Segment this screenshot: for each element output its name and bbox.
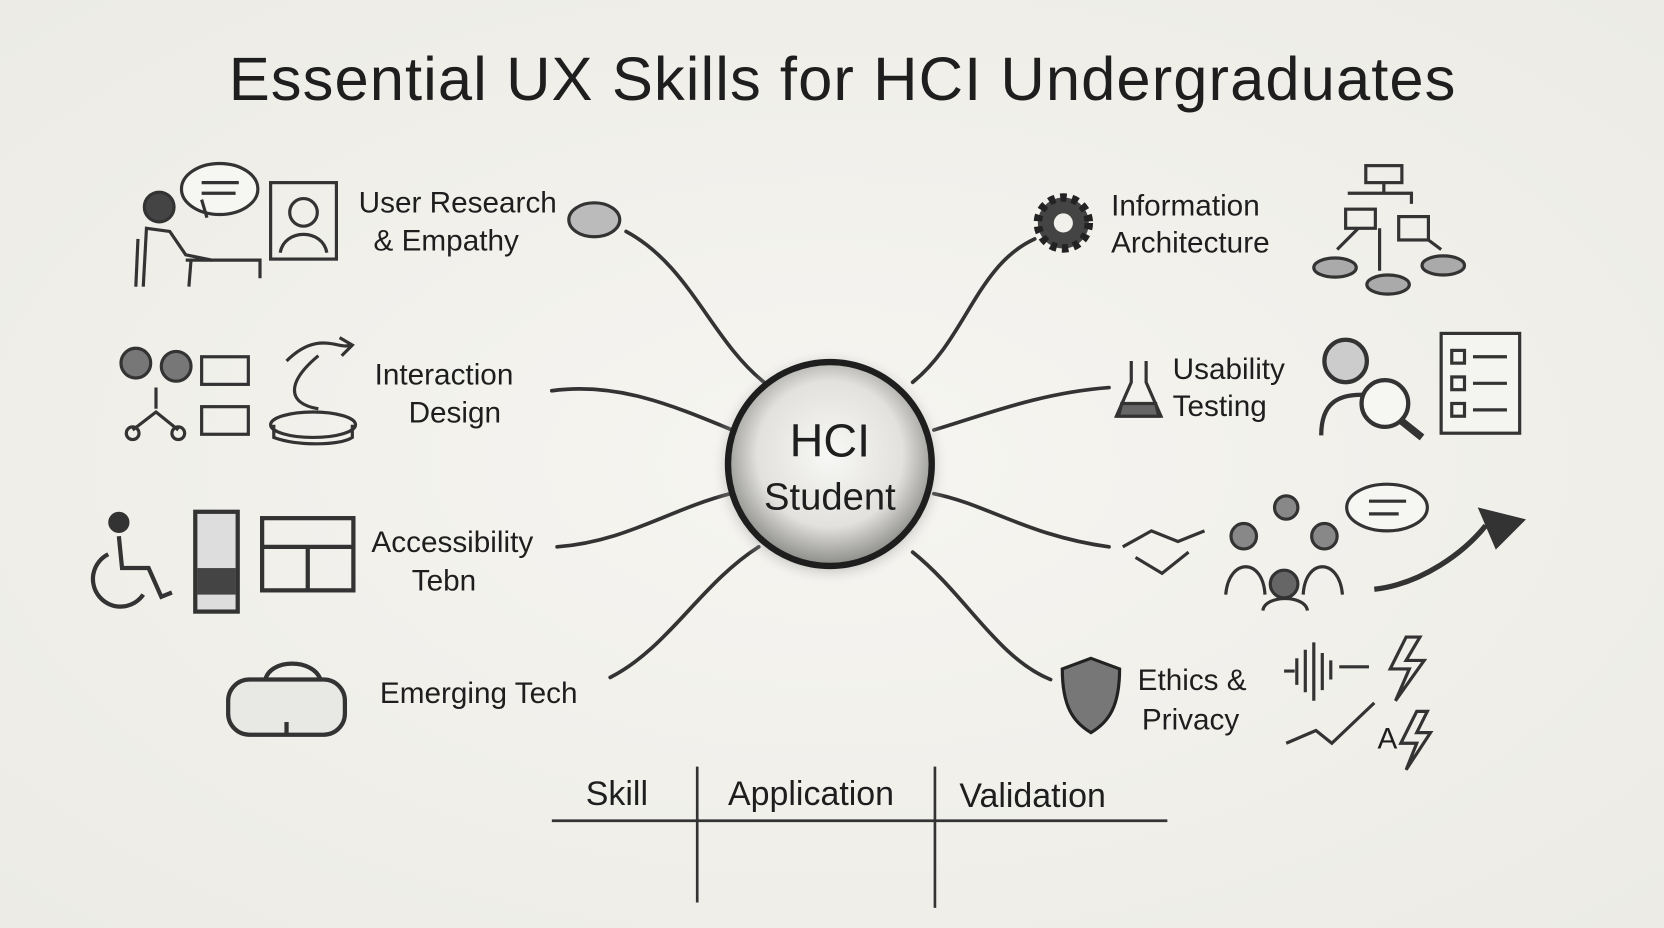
icon: brain — [569, 203, 620, 237]
label: user research: & Empathy — [374, 225, 519, 258]
label: interaction design — [375, 358, 513, 430]
icon: signal glitch — [1284, 637, 1431, 770]
label: information architecture: Information — [1111, 190, 1260, 223]
icon: gear — [1038, 197, 1089, 248]
icon: signal glitch: A — [1377, 723, 1397, 756]
icon: user magnifier — [1321, 340, 1422, 437]
label: ethics privacy: Ethics & — [1138, 664, 1247, 697]
table: Validation — [959, 777, 1106, 815]
label: information architecture: Architecture — [1111, 227, 1270, 260]
central node: HCI — [790, 415, 870, 467]
icon: collaboration — [1123, 484, 1523, 611]
icon: checklist — [1441, 333, 1520, 433]
label: accessibility: Accessibility — [371, 526, 533, 559]
label: interaction design: Design — [409, 397, 501, 430]
central node: Student — [764, 476, 896, 519]
icon: interaction flow — [121, 338, 356, 444]
label: emerging tech: Emerging Tech — [380, 677, 578, 710]
label: usability testing — [1173, 353, 1285, 423]
label: ethics privacy: Privacy — [1142, 703, 1239, 736]
central node — [711, 348, 949, 586]
label: interaction design: Interaction — [375, 358, 513, 391]
branches — [552, 231, 1109, 680]
icon: accessibility — [93, 512, 353, 612]
label: user research — [359, 186, 557, 258]
icon: sitemap — [1314, 166, 1464, 294]
label: information architecture — [1111, 190, 1270, 260]
label: accessibility — [371, 526, 533, 597]
table: Skill — [586, 775, 648, 813]
label: usability testing: Usability — [1173, 353, 1285, 386]
label: ethics privacy — [1138, 664, 1247, 736]
icon: vr headset — [228, 664, 345, 735]
table — [552, 767, 1167, 908]
table: Application — [728, 775, 894, 813]
label: accessibility: Tebn — [412, 564, 476, 597]
icon: shield — [1062, 658, 1120, 733]
icon: flask — [1116, 361, 1161, 416]
label: usability testing: Testing — [1173, 390, 1267, 423]
title: Essential UX Skills for HCI Undergraduates — [229, 45, 1457, 114]
icon: user interview — [136, 164, 336, 287]
label: user research: User Research — [359, 186, 557, 219]
